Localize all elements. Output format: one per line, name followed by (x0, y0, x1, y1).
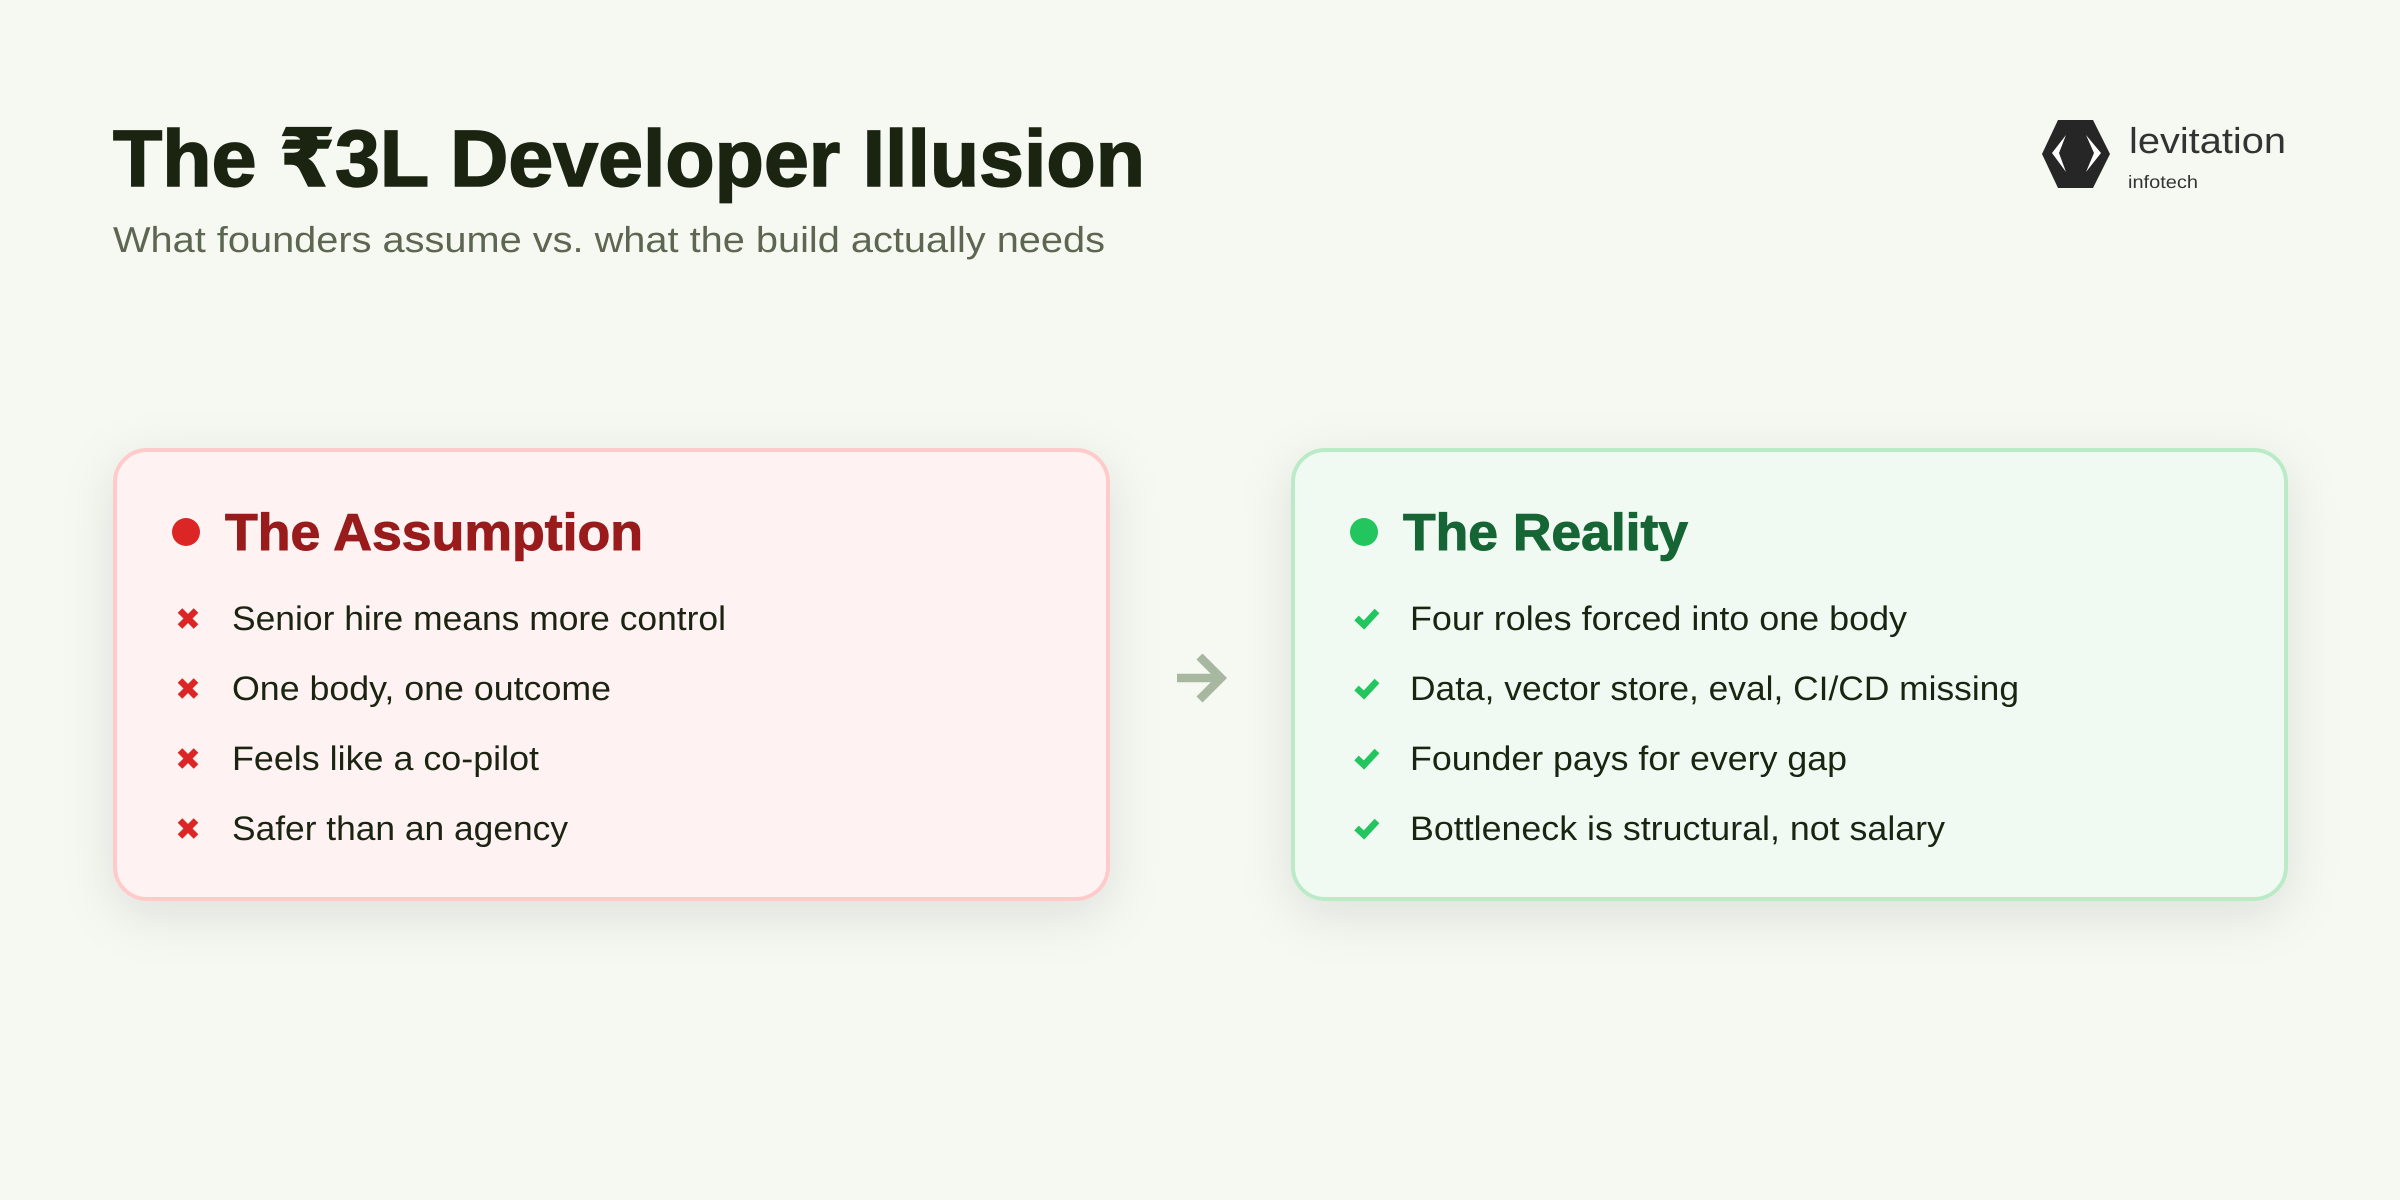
panel card (115, 450, 1108, 899)
status dot (1350, 518, 1378, 546)
title: The ₹3L Developer Illusion (113, 114, 1145, 203)
row: one body (180, 670, 611, 708)
logo wordmark: levitation (2129, 120, 2286, 161)
icon: hexagon logo mark (2042, 120, 2110, 188)
row: data (1356, 670, 2019, 708)
subtitle: What founders assume vs. what the build actually needs (113, 219, 1105, 260)
logo tagline: infotech (2128, 172, 2198, 192)
row: senior hire (180, 600, 726, 638)
row text: Senior hire means more control (232, 600, 726, 638)
panel: the assumption (115, 450, 1108, 899)
heading: The Assumption (225, 504, 643, 562)
row text: One body, one outcome (232, 670, 611, 708)
panel: the reality (1293, 450, 2286, 899)
row text: Data, vector store, eval, CI/CD missing (1410, 670, 2019, 708)
icon: check (1356, 751, 1377, 765)
row: founder pays (1356, 740, 1847, 778)
icon: check (1356, 821, 1377, 835)
row text: Founder pays for every gap (1410, 740, 1847, 778)
row text: Four roles forced into one body (1410, 600, 1907, 638)
row: four roles (1356, 600, 1907, 638)
arrow (1177, 656, 1221, 700)
icon: check (1356, 611, 1377, 625)
row: co-pilot (180, 740, 540, 778)
icon: cross (180, 680, 196, 696)
icon: cross (180, 610, 196, 626)
icon: check (1356, 681, 1377, 695)
panel card (1293, 450, 2286, 899)
icon: cross (180, 750, 196, 766)
row: bottleneck (1356, 810, 1945, 848)
logo: levitation infotech (2042, 120, 2286, 192)
row: safer (180, 810, 568, 848)
row text: Safer than an agency (232, 810, 568, 848)
icon: cross (180, 820, 196, 836)
row text: Feels like a co-pilot (232, 740, 540, 778)
status dot (172, 518, 200, 546)
heading: The Reality (1403, 504, 1688, 562)
row text: Bottleneck is structural, not salary (1410, 810, 1945, 848)
